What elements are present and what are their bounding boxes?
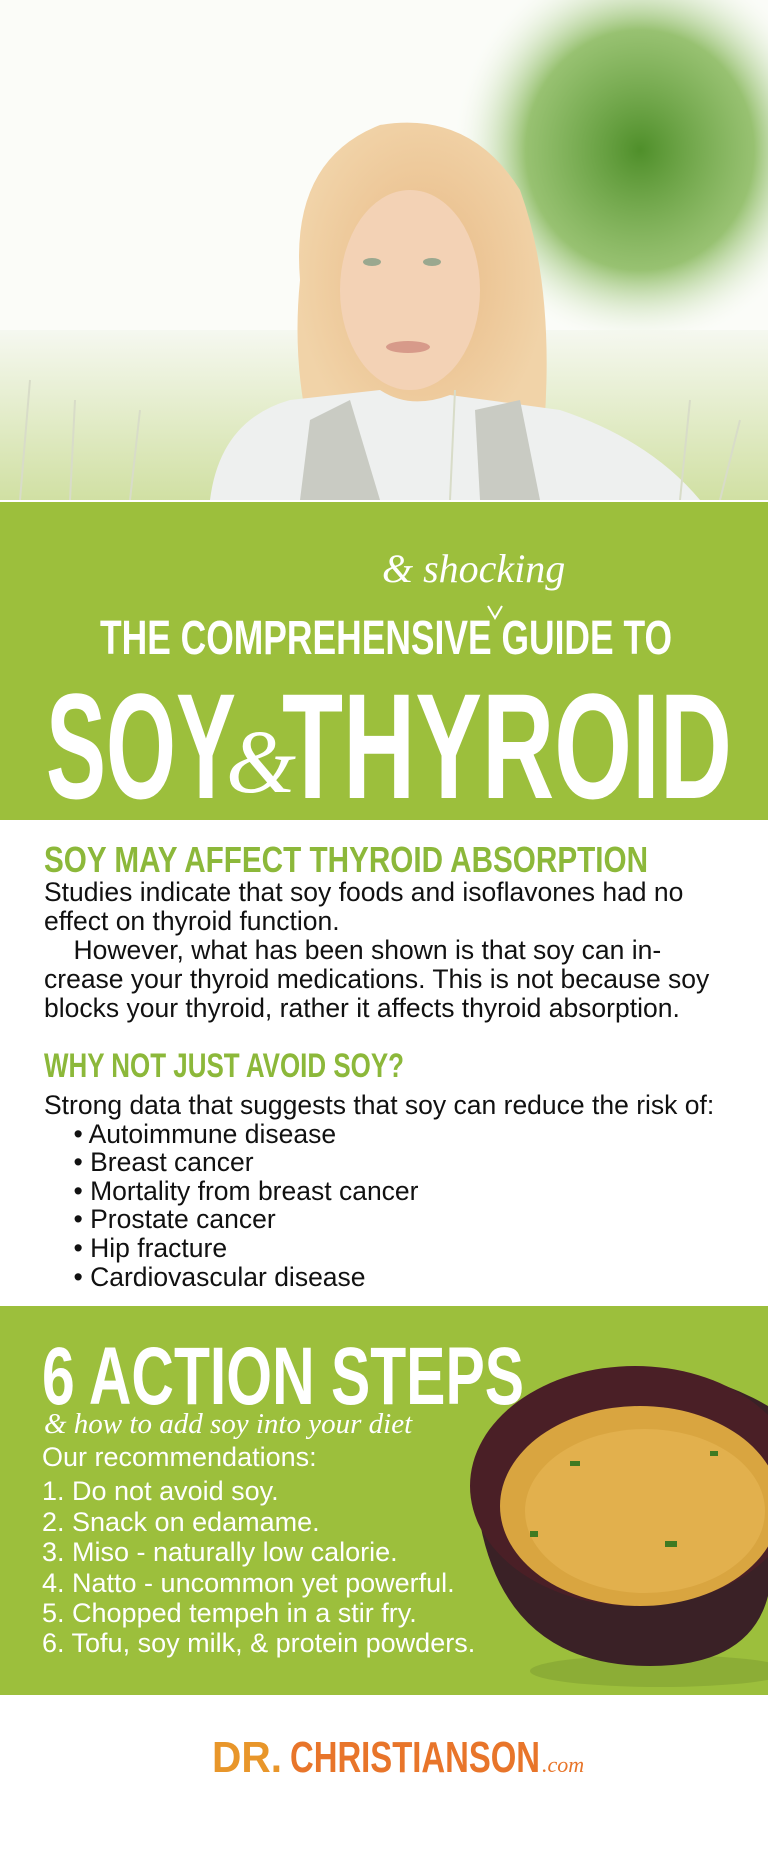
recommendations list [42,1442,475,1658]
body text: blocks your thyroid, rather it affects thyroid absorption. [44,993,680,1023]
recommendations list: 4. Natto - uncommon yet powerful. [42,1568,455,1598]
hero photo [0,0,768,500]
benefits list: Strong data that suggests that soy can reduce the risk of: [44,1090,714,1120]
icon: miso soup bowl [470,1366,768,1687]
script subtitle: & how to add soy into your diet [44,1408,412,1440]
main title [46,662,732,830]
body text [44,877,710,1023]
script annotation: & shocking [382,546,565,618]
recommendations list: 5. Chopped tempeh in a stir fry. [42,1598,417,1628]
benefits list: • Hip fracture [73,1233,227,1263]
recommendations list: 6. Tofu, soy milk, & protein powders. [42,1628,475,1658]
section: why not just avoid soy [44,1047,714,1292]
panel: action steps [0,1306,768,1695]
benefits list: • Prostate cancer [73,1204,276,1234]
recommendations list: 3. Miso - naturally low calorie. [42,1537,398,1567]
body text: Studies indicate that soy foods and isoflavones had no [44,877,683,907]
benefits list: • Mortality from breast cancer [73,1176,418,1206]
main title: & [226,713,296,812]
benefits list [44,1090,714,1292]
footer logo: .com [542,1752,584,1777]
recommendations list: 1. Do not avoid soy. [42,1476,279,1506]
body text: However, what has been shown is that soy can in- [73,935,661,965]
benefits list: • Breast cancer [73,1147,254,1177]
body text: effect on thyroid function. [44,906,340,936]
recommendations list: Our recommendations: [42,1442,317,1472]
section: soy may affect thyroid absorption [44,839,710,1023]
body text: crease your thyroid medications. This is not because soy [44,964,709,994]
benefits list: • Cardiovascular disease [73,1262,366,1292]
recommendations list: 2. Snack on edamame. [42,1507,320,1537]
script annotation: & shocking: & shocking [382,546,565,591]
title band [0,502,768,820]
benefits list: • Autoimmune disease [73,1119,336,1149]
